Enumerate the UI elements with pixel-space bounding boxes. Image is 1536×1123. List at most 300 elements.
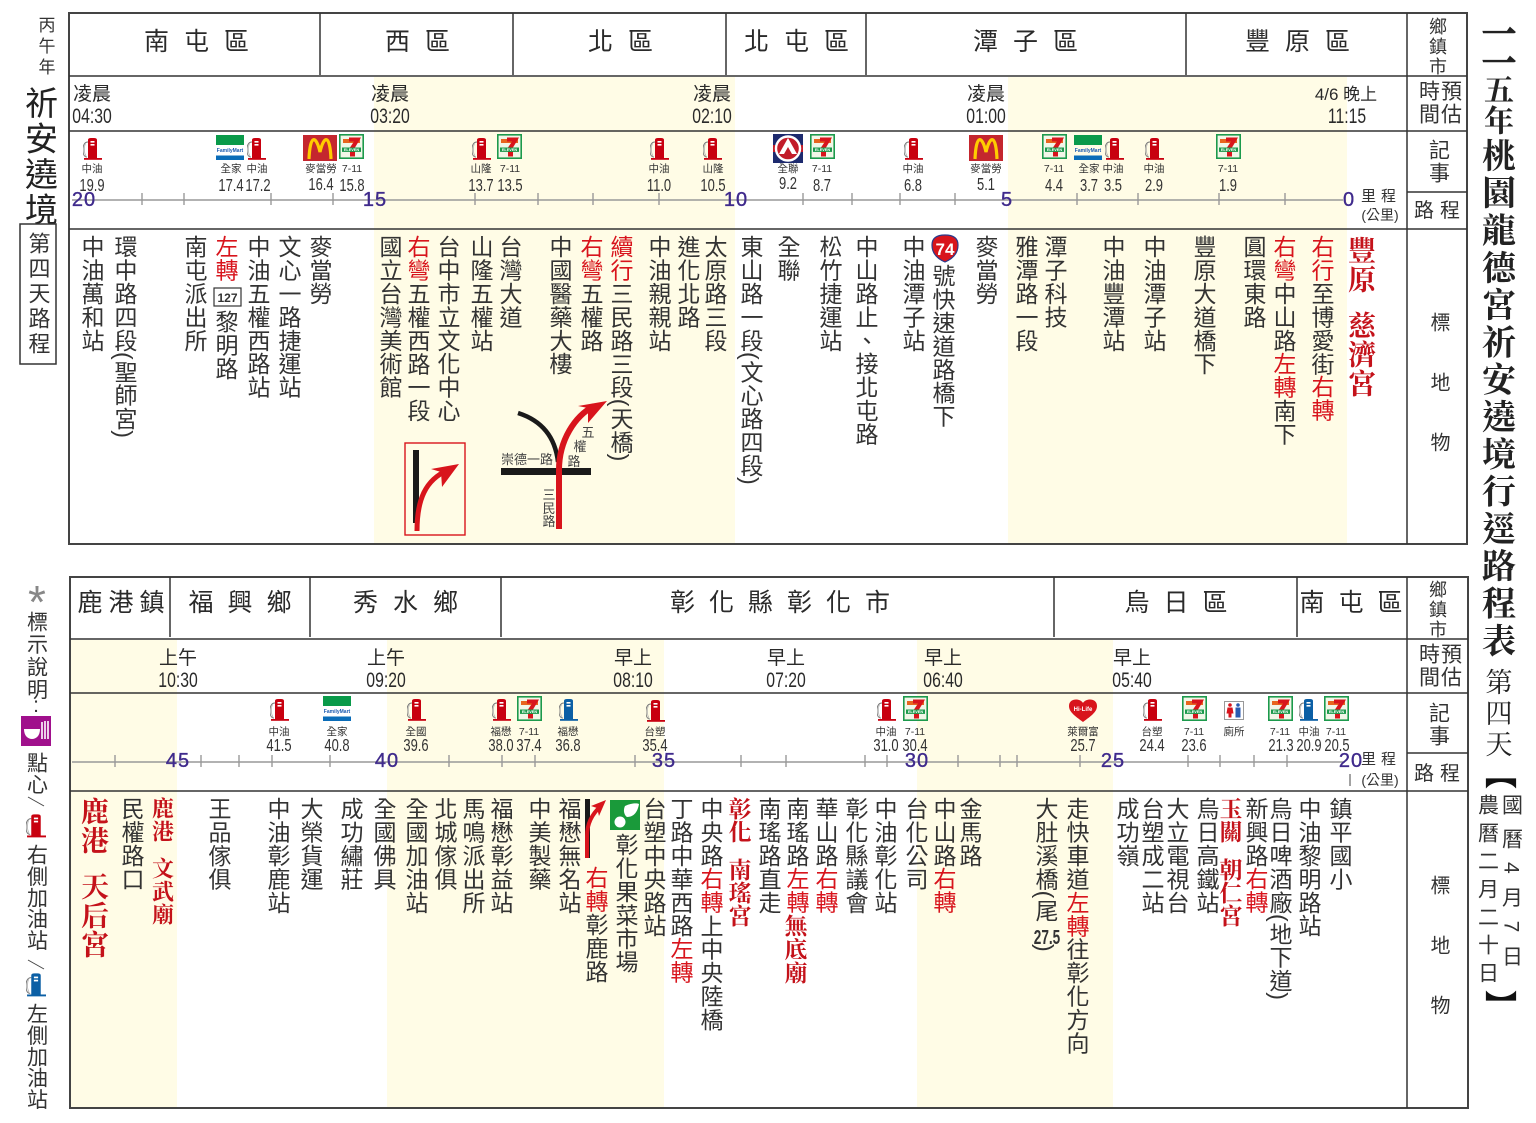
landmark: 民權路口	[118, 797, 144, 891]
stop: 福懋 38.0: 福懋	[490, 725, 512, 738]
landmark: 烏日啤酒廠(地下道)	[1266, 797, 1292, 1000]
stop: 台塑 24.4	[1139, 699, 1165, 756]
stop: 7-11 20.5: 7-11	[1326, 726, 1346, 738]
stop: 福懋 36.8	[555, 699, 581, 756]
table grid	[69, 13, 1467, 544]
landmark: 中油親親站	[645, 235, 672, 352]
landmark: 台中市立文化中心	[434, 235, 460, 422]
heading: 祈安遶境: 祈安遶境	[20, 86, 58, 228]
legend separator	[28, 960, 44, 969]
landmark: 馬鳴派出所	[459, 797, 486, 914]
stop: 台塑 24.4: 台塑	[1142, 725, 1163, 738]
stop: 福懋 38.0	[488, 699, 514, 756]
left sidebar: event title and legend	[19, 16, 58, 1110]
stop: restroom: 廁所	[1224, 725, 1245, 738]
distance unit label	[1361, 188, 1401, 223]
landmark: 右彎 中山路 左轉 南下	[1270, 235, 1296, 446]
row: townships: 秀水鄉	[353, 589, 473, 617]
stop: 7-11 23.6	[1181, 696, 1207, 756]
landmarks: upper row	[78, 235, 1382, 485]
stop: 中油 31.0: 中油	[876, 725, 896, 738]
landmark: 中油潭子站	[1140, 235, 1166, 352]
diagram: right-bend sign	[405, 443, 465, 535]
row: townships: 鹿港鎮	[77, 589, 171, 617]
row header: distance: 路程	[1414, 199, 1466, 222]
row header: landmarks: 標地物	[1427, 312, 1450, 492]
diagram: junction map: 權	[573, 439, 587, 454]
stop: 中油 2.9: 2.9	[1145, 176, 1163, 196]
landmark: 南瑤路直走	[755, 797, 782, 914]
stop: 台塑 35.4: 35.4	[642, 736, 668, 756]
row header: notes: 記事	[1426, 139, 1450, 185]
landmark: 大肚溪橋(尾	[1032, 797, 1058, 922]
stop: 中油 6.8	[902, 138, 924, 196]
landmark with temple 無底廟: 南瑤路 左轉 無底廟	[780, 797, 812, 984]
landmark: 麥當勞	[972, 235, 998, 305]
landmark: 中山路止、接北屯路	[852, 235, 878, 446]
opening bracket: 【	[1481, 757, 1517, 789]
distance ruler: 40	[375, 750, 399, 772]
temple: 鹿港 文武廟: 文武廟	[148, 857, 178, 926]
row: estimated times: 上午	[367, 647, 405, 669]
landmark: 金馬路	[956, 797, 982, 867]
stop: 福懋 36.8: 福懋	[558, 725, 579, 738]
stop: 中油 17.2: 17.2	[245, 176, 271, 196]
landmark: 新興路 右轉	[1242, 797, 1268, 914]
row header: landmarks: 標地物	[1427, 875, 1450, 1055]
stop: 7-11 4.4: 7-11	[1044, 163, 1064, 175]
row: estimated times: 05:40	[1112, 668, 1152, 692]
row: townships: 西區	[385, 28, 465, 56]
landmark: 彰化縣議會	[842, 797, 868, 914]
row header: estimated time: 時間	[1416, 80, 1440, 126]
stop: 福懋 38.0: 38.0	[488, 736, 514, 756]
landmark: 福懋無名站	[555, 797, 582, 914]
stop: 中油 20.9: 20.9	[1296, 736, 1322, 756]
row: estimated times: 07:20	[766, 668, 806, 692]
distance unit label	[1350, 751, 1401, 788]
stop: 山隆 10.5: 山隆	[702, 162, 724, 175]
landmark: 山隆五權站	[467, 235, 494, 352]
legend asterisk: *	[28, 576, 46, 628]
landmark: 中山路 右轉	[930, 797, 956, 914]
stop: 中油 6.8: 6.8	[904, 176, 922, 196]
landmark: 豐原大道橋下	[1190, 235, 1216, 375]
stop: 台塑 24.4: 24.4	[1139, 736, 1165, 756]
landmark: 南屯派出所	[181, 235, 208, 352]
stop: 中油 3.5	[1102, 138, 1124, 196]
legend: right side gas station: 右側加油站	[24, 844, 48, 951]
stop: 7-11 1.9: 7-11	[1218, 163, 1238, 175]
row: estimated times: 09:20	[366, 668, 406, 692]
row: townships: 福興鄉	[188, 589, 306, 617]
landmark: 環中路四段(聖師宮)	[111, 235, 138, 438]
stop: 麥當勞 5.1: 5.1	[977, 175, 995, 195]
landmark: 太原路三段	[701, 235, 728, 352]
turn: 左轉: 左轉	[212, 235, 238, 282]
stop: 全家 3.7	[1074, 135, 1102, 196]
stop: 7-11 37.4	[516, 696, 542, 756]
row: estimated times	[72, 83, 1377, 128]
stop: 麥當勞 16.4: 16.4	[308, 175, 334, 195]
stop: 7-11 4.4: 4.4	[1045, 176, 1063, 196]
stop: 中油 41.5	[266, 699, 292, 756]
landmark: 中油豐潭站	[1099, 235, 1126, 352]
stop: 山隆 13.7: 13.7	[468, 176, 494, 196]
stop: 中油 19.9	[79, 138, 105, 196]
stop: 全聯 9.2: 9.2	[779, 174, 797, 194]
stop: 全家 40.8: 全家	[326, 725, 348, 738]
legend heading: 標示說明	[24, 611, 48, 701]
road number 127: 127	[217, 291, 238, 305]
stop: 全家 3.7: 3.7	[1080, 176, 1098, 196]
landmark: 潭子科技	[1041, 235, 1068, 329]
main title: 五年: 五年	[1477, 74, 1521, 136]
stop: 中油 3.5: 3.5	[1104, 176, 1122, 196]
row: estimated times: 早上	[767, 647, 805, 669]
legend separator	[28, 797, 44, 806]
stop: 中油 17.2	[245, 138, 271, 196]
stop: 萊爾富 25.7	[1067, 700, 1099, 756]
legend: left side gas station: 左側加油站	[24, 1003, 48, 1110]
road number 127	[214, 288, 241, 306]
stop: 全聯 9.2	[773, 134, 803, 194]
stop: 7-11 30.4: 30.4	[902, 736, 928, 756]
temple: 彰化 南瑤宮: 南瑤宮	[724, 858, 756, 927]
landmark: 王品傢俱	[205, 797, 232, 891]
icon: snack bowl	[21, 716, 51, 746]
stop: 全國 39.6: 全國	[406, 726, 426, 738]
temple: 鹿港 天后宮: 鹿港	[75, 797, 115, 855]
yellow day shading	[70, 640, 1113, 1108]
row: estimated times: 凌晨	[73, 83, 111, 105]
landmark: 台塑成二站	[1138, 797, 1164, 914]
stop: 7-11 8.7: 7-11	[812, 163, 832, 175]
stop: 山隆 13.7: 山隆	[470, 162, 492, 175]
landmarks: lower row	[75, 796, 1352, 1054]
landmark: 文心一路捷運站	[275, 235, 302, 399]
diagram: junction map: 崇德一路	[501, 452, 553, 467]
landmark: 台塑中央路站	[640, 797, 666, 937]
diagram: junction map	[501, 401, 607, 529]
row: estimated times: 4/6 晚上	[1315, 85, 1377, 104]
row: estimated times: 11:15	[1328, 104, 1366, 128]
stop: 中油 31.0: 31.0	[873, 736, 899, 756]
landmark: 中油彰鹿站	[264, 797, 290, 914]
stop: 麥當勞 5.1: 麥當勞	[970, 162, 1002, 175]
row: townships: 北區	[588, 28, 668, 56]
stop: 萊爾富 25.7: 25.7	[1070, 736, 1096, 756]
stop: 麥當勞 16.4: 麥當勞	[305, 162, 337, 175]
legend: snack: 點心	[24, 752, 48, 795]
icon: left-side gas station	[26, 973, 46, 996]
row header: estimated time: 時間	[1416, 643, 1440, 689]
temple: 鹿港 文武廟: 鹿港	[148, 797, 178, 843]
landmark: 福懋彰益站	[487, 797, 514, 914]
temple: 豐原 慈濟宮: 慈濟宮	[1342, 311, 1382, 398]
landmark: 右轉 彰鹿路	[582, 866, 608, 983]
landmark: 中油五權西路站	[244, 235, 270, 399]
stop: 7-11 37.4: 37.4	[516, 736, 542, 756]
row: townships	[77, 589, 1417, 617]
stop: 中油 20.9	[1296, 699, 1322, 756]
row: estimated times: 凌晨	[967, 83, 1005, 105]
stop: 全國 39.6	[403, 699, 429, 756]
diagram: junction map: 五	[581, 425, 595, 440]
distance ruler: 0	[1343, 189, 1355, 211]
row: estimated times: 02:10	[692, 104, 732, 128]
distance ruler: 25	[1101, 750, 1125, 772]
stop: 山隆 13.7	[468, 138, 494, 196]
panel: route table upper (南屯區 to 豐原區)	[68, 12, 1468, 545]
stop: 7-11 21.3: 21.3	[1268, 736, 1294, 756]
landmark: 黎明路	[212, 310, 238, 380]
distance unit label: 里程	[1361, 751, 1401, 768]
landmark: 大立電視台	[1163, 797, 1190, 914]
stop: 中油 11.0	[647, 138, 671, 196]
landmark: 中油潭子站	[899, 235, 926, 352]
stop: 7-11 8.7	[810, 134, 835, 196]
stop: 中油 19.9: 中油	[82, 162, 102, 175]
row header: distance: 路程	[1414, 762, 1466, 785]
stop: 中油 41.5: 41.5	[266, 736, 292, 756]
distance ruler: 30	[905, 750, 929, 772]
row: townships: 烏日區	[1124, 589, 1242, 617]
row: townships: 豐原區	[1245, 28, 1365, 56]
boxed day label	[20, 224, 56, 364]
stop: 7-11 30.4	[902, 696, 928, 756]
landmark: 台灣大道	[496, 235, 522, 329]
row: estimated times: 早上	[614, 647, 652, 669]
stop: 7-11 21.3: 7-11	[1270, 726, 1290, 738]
stop: 全家 3.7: 全家	[1078, 162, 1100, 175]
stop: 7-11 20.5: 20.5	[1324, 736, 1350, 756]
row header: notes: 記事	[1426, 702, 1450, 748]
stop: 7-11 13.5: 13.5	[497, 176, 523, 196]
landmark: 國立台灣美術館	[376, 235, 402, 399]
distance ruler: 20	[1339, 750, 1363, 772]
landmark: 中美製藥	[525, 797, 552, 891]
stop: 中油 11.0: 中油	[648, 162, 670, 175]
row: estimated times: 早上	[924, 647, 962, 669]
distance unit label: 里程	[1361, 188, 1401, 205]
landmark: 中油黎明路站	[1295, 797, 1322, 937]
stop: 全家 17.4: 全家	[220, 162, 242, 175]
landmark: 進化北路	[674, 235, 700, 329]
landmark: 烏日高鐵站	[1193, 797, 1220, 914]
distance ruler: 20	[72, 189, 96, 211]
diagram: junction map: 路	[567, 454, 581, 469]
row header: estimated time: 預估	[1438, 80, 1462, 126]
landmark: 中國醫藥大樓	[546, 235, 572, 375]
right sidebar: main title and dates	[1474, 16, 1524, 1022]
icon: right-side gas station	[26, 814, 46, 837]
stop: 麥當勞 16.4	[303, 135, 337, 195]
stop: 中油 20.9: 中油	[1298, 725, 1320, 738]
stop: restroom	[1224, 702, 1245, 738]
landmark: 中央路 右轉 上中央陸橋	[697, 797, 724, 1031]
panel: route table lower (鹿港鎮 to 南屯區)	[69, 576, 1469, 1109]
stop: 台塑 35.4: 台塑	[644, 725, 666, 738]
stop: 中油 31.0	[873, 699, 899, 756]
stop: 中油 3.5: 中油	[1102, 162, 1124, 175]
landmark: 成功繡莊	[337, 797, 364, 891]
stop: 7-11 1.9: 1.9	[1219, 176, 1237, 196]
stop: 台塑 35.4	[642, 700, 668, 756]
landmark: 北城傢俱	[431, 797, 458, 891]
icon: highway 74	[932, 235, 958, 262]
stop: 全家 40.8: 40.8	[324, 736, 350, 756]
landmark: 麥當勞	[306, 235, 332, 305]
stop: 中油 17.2: 中油	[246, 162, 268, 175]
diagram: right-turn arrow	[585, 799, 606, 858]
distance ruler: 35	[652, 750, 676, 772]
landmark: 成功嶺	[1113, 797, 1140, 867]
stop: 萊爾富 25.7: Hi-Life	[1074, 707, 1093, 713]
stop: 山隆 10.5: 10.5	[700, 176, 726, 196]
temple: 玉關 朝仁宮: 玉關	[1214, 797, 1248, 843]
icon: fruit market	[610, 800, 640, 830]
row header: estimated time	[1416, 80, 1462, 126]
stop: 7-11 8.7: 8.7	[813, 176, 831, 196]
row: estimated times: 06:40	[923, 668, 963, 692]
landmark: 中油彰化站	[871, 797, 898, 914]
boxed day label: 第四天路程	[26, 232, 50, 357]
row: estimated times: 01:00	[966, 104, 1006, 128]
stop: 7-11 23.6: 23.6	[1181, 736, 1207, 756]
date: lunar calendar: 農曆二月二十日	[1476, 794, 1499, 990]
yellow day shading	[374, 77, 1347, 544]
row: townships: 彰化縣彰化市	[670, 589, 904, 617]
distance unit label: (公里)	[1361, 207, 1399, 223]
row: estimated times: 08:10	[613, 668, 653, 692]
landmark: 松竹捷運站	[816, 235, 842, 352]
stop: 麥當勞 5.1	[969, 135, 1003, 195]
stop: 全家 40.8	[323, 696, 351, 756]
landmark: 圓環東路	[1240, 235, 1266, 329]
distance ruler: 15	[363, 189, 387, 211]
stop: 福懋 36.8: 36.8	[555, 736, 581, 756]
row: estimated times: 03:20	[370, 104, 410, 128]
main title: 一一: 一一	[1474, 16, 1524, 74]
row header: estimated time	[1416, 643, 1462, 689]
landmark: 鎮平國小	[1326, 797, 1352, 891]
closing bracket: 】	[1481, 990, 1517, 1022]
row: townships: 北屯區	[744, 28, 864, 56]
row: townships: 潭子區	[973, 28, 1093, 56]
temple: 鹿港 天后宮: 天后宮	[75, 872, 115, 959]
stop: 7-11 15.8	[339, 134, 365, 196]
landmark: 華山路 右轉	[812, 797, 838, 914]
stop: 7-11 23.6: 7-11	[1184, 726, 1204, 738]
stop: 7-11 21.3	[1268, 696, 1294, 756]
stop: 7-11 37.4: 7-11	[519, 726, 539, 738]
stop: 全家 17.4	[216, 135, 244, 196]
icon: highway 74: 74	[936, 240, 955, 259]
landmark: 右彎 五權路	[577, 235, 604, 352]
stop: 全聯 9.2: 全聯	[778, 163, 799, 175]
stop: 7-11 1.9	[1216, 134, 1241, 196]
stop: 7-11 4.4	[1042, 134, 1067, 196]
row: estimated times: 凌晨	[693, 83, 731, 105]
stop: 中油 2.9: 中油	[1144, 162, 1164, 175]
row header: townships: 鄉鎮市	[1427, 580, 1447, 640]
diagram: junction map: 三民路	[540, 488, 556, 528]
stop: 7-11 13.5: 7-11	[500, 163, 520, 175]
temple: 豐原 慈濟宮: 豐原	[1342, 236, 1382, 294]
row: townships: 南屯區	[144, 28, 264, 56]
table grid	[70, 577, 1468, 1108]
landmark: 全國佛具	[370, 797, 396, 891]
distance ruler	[72, 750, 1363, 772]
temple: 彰化 南瑤宮: 彰化	[724, 797, 756, 843]
date: national calendar: 國曆4月7日	[1500, 794, 1523, 979]
landmark: 東山路一段(文心路四段)	[737, 235, 764, 485]
bridge end distance 27.5: 27.5	[1034, 926, 1061, 949]
stop: 全家 17.4: 17.4	[218, 176, 244, 196]
stop: 萊爾富 25.7: 萊爾富	[1067, 725, 1099, 738]
landmark: 號快速道路橋下	[929, 264, 956, 428]
row: estimated times: 04:30	[72, 104, 112, 128]
day label: 第四天	[1480, 668, 1518, 761]
row: estimated times: 上午	[159, 647, 197, 669]
stop: 7-11 15.8: 7-11	[342, 163, 362, 175]
landmark: 右行 至博愛街 右轉	[1308, 235, 1334, 422]
row: estimated times: 10:30	[158, 668, 198, 692]
row: townships: 南屯區	[1299, 589, 1417, 617]
landmark: 雅潭路一段	[1012, 235, 1038, 352]
temple: 玉關 朝仁宮: 朝仁宮	[1214, 858, 1248, 927]
stop: 7-11 13.5	[497, 134, 523, 196]
stop: 7-11 20.5	[1324, 696, 1350, 756]
landmark: 台化公司	[902, 797, 928, 891]
stop: 中油 6.8: 中油	[902, 162, 924, 175]
row header: estimated time: 預估	[1438, 643, 1462, 689]
landmark: 全聯	[774, 235, 800, 282]
stop: 7-11 15.8: 15.8	[339, 176, 365, 196]
landmark: 續行 三民路三段(天橋)	[607, 235, 634, 462]
distance ruler: 10	[724, 189, 748, 211]
stop: 7-11 30.4: 7-11	[905, 726, 925, 738]
landmark: 丁路中華西路 左轉	[667, 797, 694, 984]
landmark: 右彎 五權西路一段	[404, 235, 430, 422]
landmark: 大榮貨運	[297, 797, 324, 891]
distance ruler: 45	[166, 750, 190, 772]
legend colon: :	[24, 694, 48, 717]
stop: 中油 41.5: 中油	[268, 725, 290, 738]
main title: event: 桃園龍德宮祈安遶境行逕路程表	[1474, 138, 1524, 660]
landmark closing bracket: )	[1032, 944, 1058, 952]
landmark: 中油萬和站	[78, 235, 104, 352]
landmark: 走快車道 左轉 往彰化方向	[1063, 797, 1090, 1054]
stop: 中油 2.9	[1144, 138, 1164, 196]
landmark: 彰化果菜市場	[612, 833, 638, 973]
distance ruler: 5	[1001, 189, 1013, 211]
row: estimated times: 凌晨	[371, 83, 409, 105]
stop: 中油 11.0: 11.0	[647, 176, 671, 196]
stop: 全國 39.6: 39.6	[403, 736, 429, 756]
row: estimated times	[158, 647, 1152, 692]
row: townships	[144, 28, 1365, 56]
stop: 中油 19.9: 19.9	[79, 176, 105, 196]
row: estimated times: 早上	[1113, 647, 1151, 669]
year label: 丙午年	[36, 16, 55, 79]
distance unit label: (公里)	[1361, 772, 1399, 788]
landmark: 全國加油站	[402, 797, 428, 914]
stop: 山隆 10.5	[700, 138, 726, 196]
distance ruler	[72, 189, 1355, 211]
row header: townships: 鄉鎮市	[1427, 17, 1447, 77]
